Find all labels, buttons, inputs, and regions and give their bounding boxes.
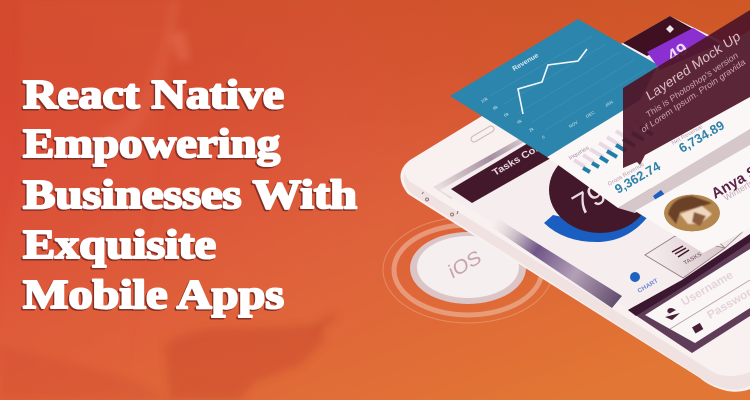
profile card	[635, 145, 750, 253]
net revenue value: 6,734.89	[676, 117, 727, 156]
gross revenue value: 9,362.74	[612, 158, 664, 197]
chart axis labels: 8k	[492, 104, 499, 111]
bar backgrounds	[574, 120, 648, 167]
revenue line	[518, 49, 587, 114]
headline line 3: Businesses With	[23, 171, 357, 217]
login form	[628, 234, 750, 353]
layered mock up callout	[623, 10, 750, 168]
dark toolbar	[623, 16, 695, 56]
outer ring	[383, 217, 553, 323]
donut dark disc	[549, 147, 651, 233]
chart tab label: CHART	[636, 277, 660, 295]
tasks complete header bar: Tasks Comp	[491, 138, 552, 178]
toolbar star icon	[666, 25, 674, 33]
callout heading: Layered Mock Up	[644, 28, 743, 104]
button face	[417, 236, 519, 298]
inquiries bar chart	[568, 120, 653, 172]
middle ring	[394, 225, 542, 315]
net revenue value: Net Revenue	[671, 124, 704, 147]
events tab label: EVENTS	[724, 221, 748, 238]
iOS label: iOS	[446, 246, 484, 283]
top toolbar of app	[623, 16, 720, 70]
screen edge band	[490, 217, 622, 308]
chart axis labels: JAN	[604, 99, 614, 108]
login dark top stripe	[628, 234, 750, 316]
chart axis labels	[480, 96, 614, 140]
tablet lower edge highlight	[404, 172, 750, 390]
chart axis labels: DEC	[585, 110, 596, 119]
chart axis labels: NOV	[568, 120, 579, 129]
gross revenue value: Gross Revenue	[607, 162, 646, 188]
purple banner	[647, 28, 720, 70]
tasks tab icon	[672, 246, 689, 257]
headline	[23, 71, 357, 317]
screen top strip	[433, 127, 556, 199]
faded photo of person holding a phone	[0, 0, 337, 400]
tablet body	[400, 16, 750, 392]
donut value: 79	[567, 177, 612, 222]
button rim	[410, 232, 526, 304]
chart axis labels: 2k	[528, 126, 535, 133]
chart grid lines	[490, 36, 645, 130]
stats card	[547, 30, 750, 208]
headline line 2: Empowering	[23, 120, 281, 166]
callout body line two: of Lorem Ipsum. Proin gravida	[640, 56, 747, 135]
headline line 1: React Native	[23, 71, 284, 117]
chart tab icon	[630, 272, 640, 282]
iOS button with rings	[383, 217, 553, 323]
chart axis labels: 6k	[503, 111, 510, 118]
revenue chart panel	[450, 19, 658, 157]
chart title: Revenue	[511, 52, 540, 73]
chart axis labels: 4k	[516, 118, 523, 125]
chart axis labels: 0	[541, 134, 546, 140]
grey strip and blue tag between cards	[618, 129, 750, 213]
chart axis labels: 10k	[480, 96, 489, 104]
profile avatar	[664, 194, 720, 232]
tasks tab	[645, 236, 725, 278]
login fields	[645, 249, 750, 343]
donut gauge	[544, 147, 664, 242]
banner number: 49	[664, 39, 692, 65]
inquiries label: Inquiries	[568, 145, 591, 162]
lock icon	[692, 323, 703, 333]
user icon	[665, 308, 680, 320]
tasks tab label: TASKS	[683, 252, 703, 267]
donut blue arc	[544, 189, 664, 242]
bar values	[583, 127, 653, 172]
login frame	[628, 234, 750, 353]
username placeholder: Username	[679, 268, 736, 308]
tab row: chart, tasks, events	[630, 212, 750, 295]
home pill	[474, 129, 491, 139]
events tab	[712, 212, 750, 248]
headline line 5: Mobile Apps	[23, 271, 284, 317]
callout body line one: This is Photoshop's version	[645, 50, 739, 120]
tasks complete header bar	[451, 133, 565, 203]
headline line 4: Exquisite	[23, 221, 216, 267]
screen	[440, 130, 750, 353]
side buttons	[422, 192, 458, 216]
